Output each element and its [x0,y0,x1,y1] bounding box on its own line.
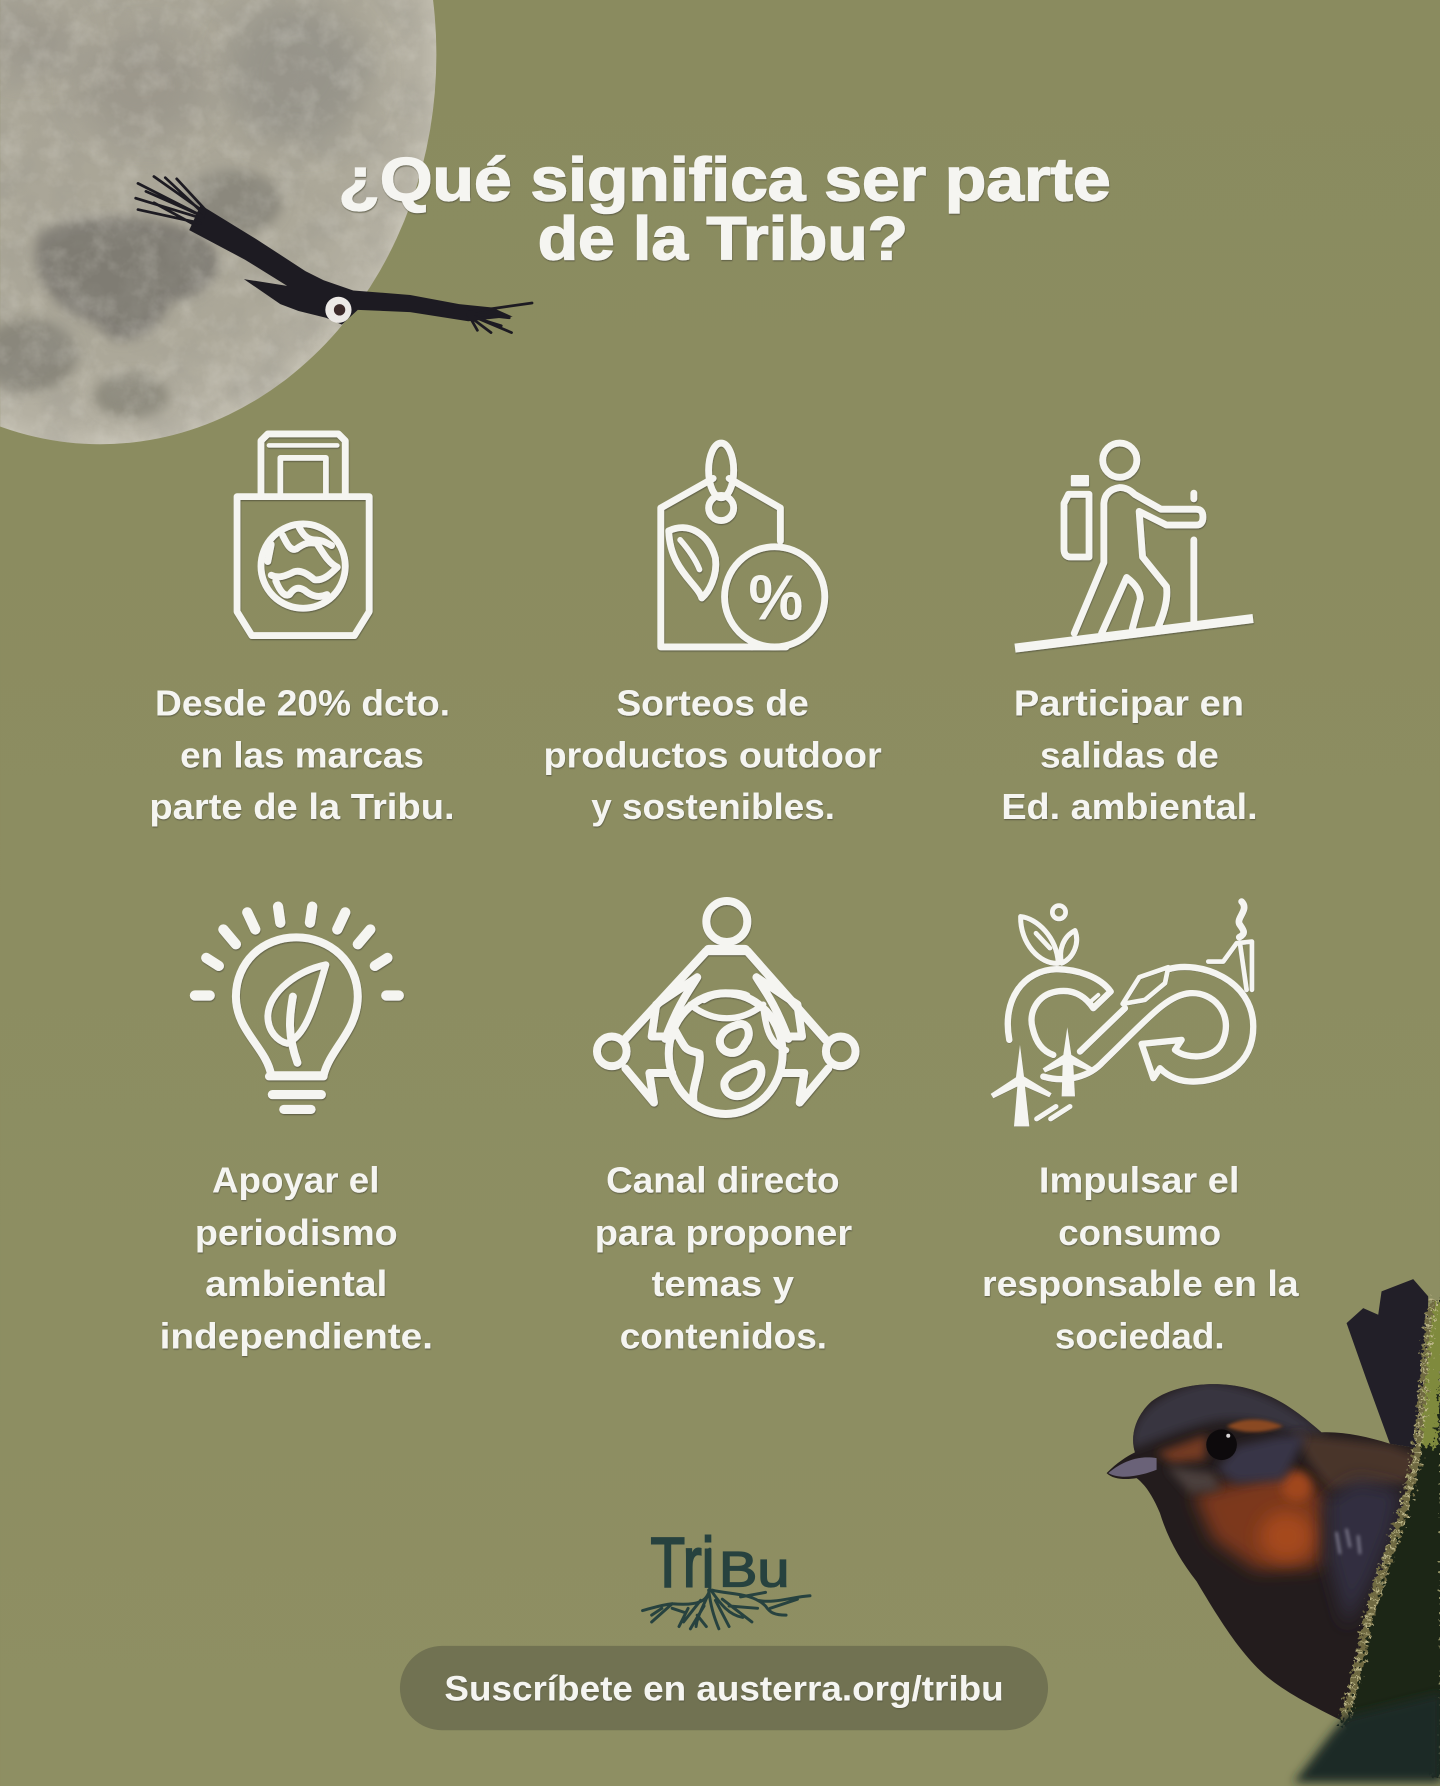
text: discount [149,682,455,827]
icon: hands holding globe [597,901,856,1114]
text: direct channel: temas y [652,1263,795,1304]
icon: light bulb with leaf [195,907,399,1109]
icon: price tag with percent: % [748,562,803,634]
text: journalism [160,1160,433,1357]
text: journalism: Apoyar el [212,1160,379,1201]
text: hikes [1001,682,1258,827]
logo: Tribu with roots: Bu [719,1542,789,1598]
text: journalism: independiente. [160,1316,433,1357]
condor [136,177,532,333]
text: responsible consumption [982,1160,1299,1357]
title: ¿Qué significa ser parte [338,145,1111,214]
icon: hiker [1015,443,1253,648]
subscribe pill: Suscríbete en austerra.org/tribu [444,1670,1004,1709]
text: discount: Desde 20% dcto. [155,682,450,723]
text: responsible consumption: responsable en la [982,1263,1299,1304]
text: direct channel: contenidos. [620,1316,827,1357]
text: giveaways: productos outdoor [543,735,882,776]
icon: circular economy loop [991,902,1253,1127]
bird on mossy trunk [1107,1279,1440,1782]
logo: Tribu with roots: Tri [651,1523,714,1602]
text: direct channel: Canal directo [606,1160,840,1201]
text: direct channel: para proponer [595,1212,852,1253]
text: discount: parte de la Tribu. [149,786,455,827]
text: responsible consumption: sociedad. [1055,1316,1225,1357]
text: hikes: salidas de [1040,735,1219,776]
text: journalism: ambiental [205,1263,387,1304]
icon: tote bag with globe [237,434,369,636]
logo: Tribu with roots [643,1523,810,1629]
text: giveaways [543,682,882,827]
title [338,145,1111,274]
text: hikes: Ed. ambiental. [1001,786,1258,827]
moon photo [0,0,456,456]
text: hikes: Participar en [1014,682,1244,723]
text: giveaways: y sostenibles. [591,786,835,827]
subscribe pill [400,1646,1048,1730]
text: journalism: periodismo [195,1212,398,1253]
text: giveaways: Sorteos de [616,682,809,723]
text: direct channel [595,1160,852,1357]
text: responsible consumption: consumo [1058,1212,1221,1253]
text: responsible consumption: Impulsar el [1039,1160,1239,1201]
text: discount: en las marcas [180,735,424,776]
icon: price tag with percent [661,443,825,647]
title: de la Tribu? [538,205,908,274]
